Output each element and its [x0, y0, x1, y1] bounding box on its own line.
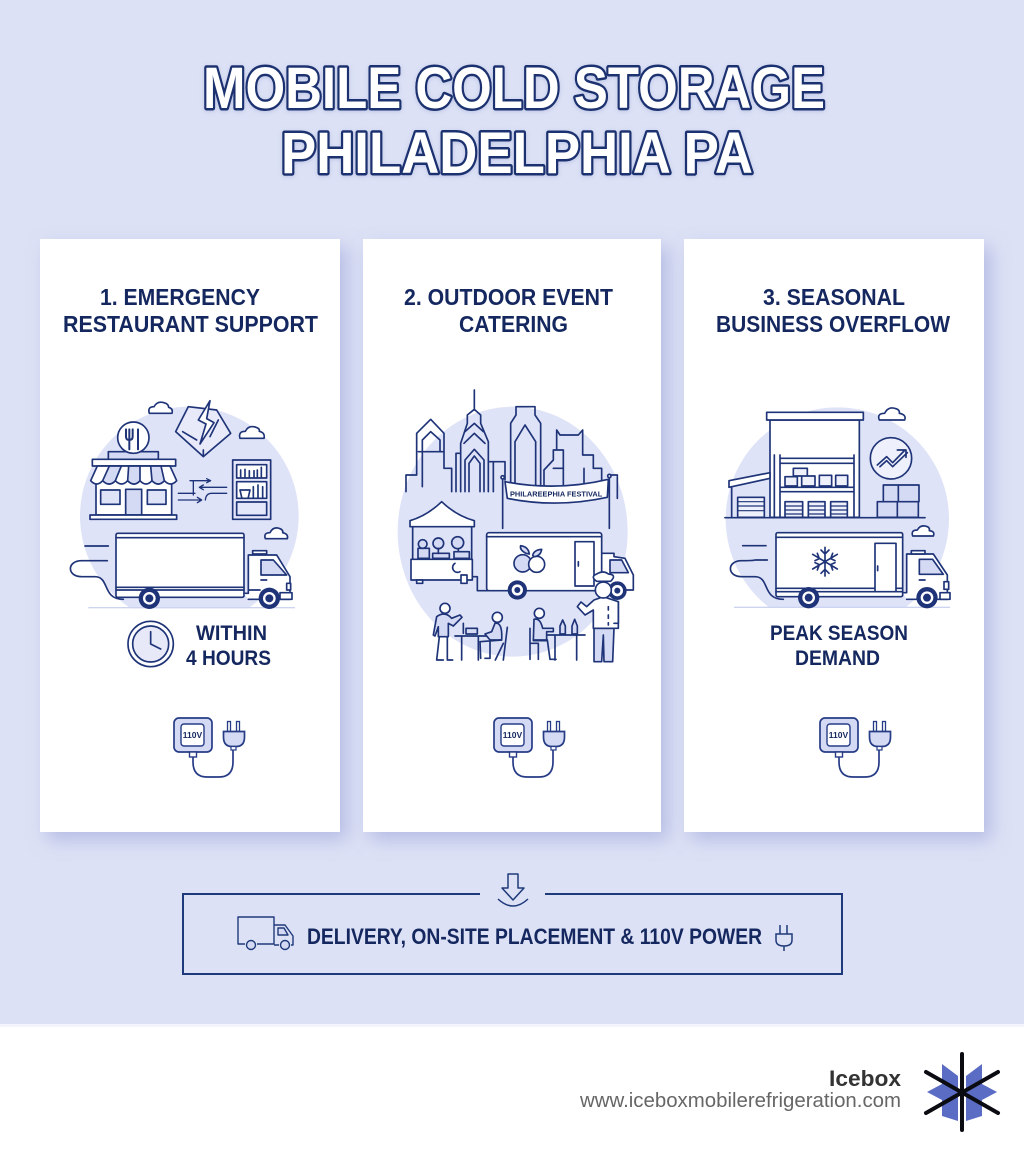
callout: peak season demand: DEMAND — [795, 647, 880, 670]
icon: 110V plug — [820, 718, 890, 777]
icon: cloud — [912, 526, 934, 536]
icon: 110V plug — [174, 718, 244, 777]
icon: broken ice — [176, 401, 231, 457]
icon: cloud — [879, 408, 905, 420]
icon: 110V plug: 110V — [829, 730, 849, 740]
icon: exchange arrows — [178, 479, 227, 503]
illustration: warehouse and refrigerated truck — [725, 407, 950, 631]
brand name: Icebox — [829, 1066, 902, 1091]
callout: peak season demand: PEAK SEASON — [770, 622, 908, 645]
truck with fruit — [487, 533, 633, 600]
icon: growth chart — [870, 438, 912, 479]
banner text: DELIVERY, ON-SITE PLACEMENT & 110V POWER — [307, 924, 762, 949]
callout: within 4 hours — [186, 622, 271, 670]
heading: panel 2: CATERING — [459, 311, 568, 337]
heading: panel 2: 2. OUTDOOR EVENT — [404, 284, 613, 310]
icon: small plug — [776, 925, 792, 951]
panel: outdoor event catering — [363, 239, 661, 832]
icon: refrigerator — [233, 460, 271, 519]
illustration: skyline, festival, truck and diners — [398, 390, 633, 662]
callout: peak season demand — [770, 622, 908, 670]
service banner — [183, 874, 842, 974]
panel: emergency restaurant support — [40, 239, 340, 832]
heading: panel 1: 1. EMERGENCY — [100, 284, 260, 310]
icon: cloud — [240, 427, 264, 438]
icon: 110V plug: 110V — [503, 730, 523, 740]
festival banner — [501, 474, 611, 528]
heading: panel 1 — [63, 284, 318, 337]
title: MOBILE COLD STORAGE — [203, 56, 825, 121]
title — [203, 56, 825, 186]
heading: panel 1: RESTAURANT SUPPORT — [63, 311, 318, 337]
diners and tables — [433, 603, 585, 660]
food tent — [410, 502, 488, 591]
skyline — [406, 390, 617, 498]
festival banner: PHILAREEPHIA FESTIVAL — [510, 490, 603, 499]
title: PHILADELPHIA PA — [281, 121, 753, 186]
icon: 110V plug: 110V — [183, 730, 203, 740]
callout: within 4 hours: WITHIN — [196, 622, 267, 645]
illustration: restaurant, ice, fridge and truck — [70, 401, 299, 667]
callout: within 4 hours: 4 HOURS — [186, 647, 271, 670]
heading: panel 3: BUSINESS OVERFLOW — [716, 311, 950, 337]
footer — [0, 1024, 1024, 1154]
icon: stacked boxes — [877, 485, 919, 517]
icon: cloud — [265, 528, 288, 539]
delivery truck with snowflake — [730, 533, 950, 608]
heading: panel 3: 3. SEASONAL — [763, 284, 905, 310]
icon: cloud — [149, 402, 172, 413]
icon: small truck — [238, 917, 293, 950]
heading: panel 2 — [404, 284, 613, 337]
website url: www.iceboxmobilerefrigeration.com — [579, 1090, 901, 1112]
icon: restaurant storefront — [90, 422, 177, 519]
icon: logo snowflake — [926, 1054, 998, 1130]
icon: clock — [128, 621, 173, 667]
warehouse — [725, 412, 925, 518]
icon: delivery truck — [70, 533, 292, 609]
chef — [577, 572, 618, 662]
heading: panel 3 — [716, 284, 950, 337]
panel: seasonal business overflow — [684, 239, 984, 832]
icon: down arrow — [498, 874, 528, 906]
icon: 110V plug — [494, 718, 564, 777]
